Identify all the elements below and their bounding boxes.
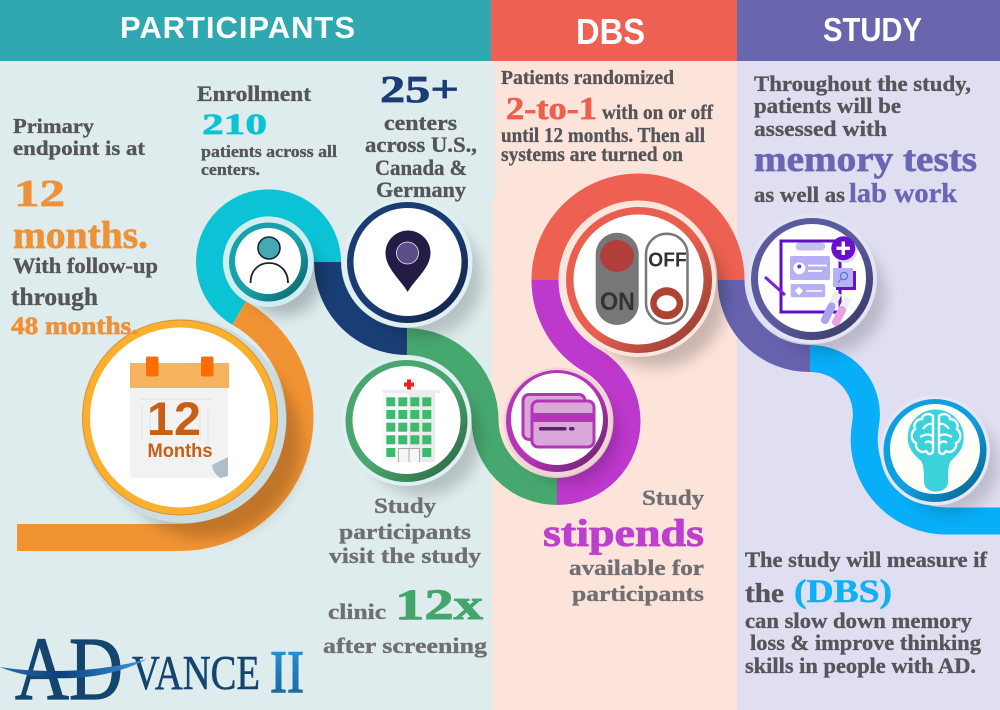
text: stipends: stipends <box>543 512 704 555</box>
text: clinic visits: after screening <box>323 633 487 658</box>
panel: DBS background <box>492 61 737 710</box>
text: randomization: with on or off <box>602 100 714 124</box>
text: clinic visits: participants <box>339 519 471 544</box>
text: stipends: available for <box>569 555 704 580</box>
text: stipends: participants <box>572 581 704 606</box>
text: enrollment: centers. <box>201 160 260 179</box>
text: primary endpoint: 12 <box>14 173 65 215</box>
text: memory tests: lab work <box>849 178 957 208</box>
text: memory tests: patients will be <box>754 93 901 118</box>
text: primary endpoint: 48 months. <box>11 313 138 340</box>
text: enrollment: Enrollment <box>197 81 312 106</box>
text: primary endpoint: through <box>11 284 98 311</box>
text: randomization: Patients randomized <box>501 67 674 89</box>
panel: participants background <box>0 0 495 710</box>
text: memory tests: Throughout the study, <box>754 71 971 96</box>
text: randomization <box>501 67 714 166</box>
text: randomization: until 12 months. Then all <box>501 123 705 147</box>
text: primary endpoint: With follow-up <box>13 253 158 278</box>
panel: study background <box>737 61 1000 710</box>
header: DBS: DBS <box>576 11 645 52</box>
icon: calendar 12 months badge: 12 <box>147 392 201 445</box>
icon: on off switch badge: OFF <box>648 250 687 272</box>
text: study measure: can slow down memory <box>745 608 972 633</box>
logo: ADvance II: VANCE <box>132 645 260 700</box>
text: study measure <box>745 547 988 678</box>
header: study <box>737 0 1000 61</box>
icon: credit cards badge <box>504 368 618 483</box>
header: participants: PARTICIPANTS <box>120 10 355 45</box>
text: primary endpoint: Primary <box>13 114 95 138</box>
text: primary endpoint: endpoint is at <box>13 136 145 160</box>
logo: ADvance II <box>0 620 304 710</box>
text: enrollment: patients across all <box>201 142 337 161</box>
text: enrollment <box>197 81 337 179</box>
text: memory tests <box>754 71 977 208</box>
text: memory tests: as well as <box>754 182 845 207</box>
text: stipends <box>543 485 704 606</box>
text: study measure: (DBS) <box>794 574 892 610</box>
text: study measure: skills in people with AD. <box>745 653 976 678</box>
text: 25+ centers <box>365 69 477 202</box>
text: enrollment: 210 <box>202 108 267 141</box>
text: clinic visits: 12x <box>395 582 484 629</box>
text: 25+ centers: across U.S., <box>365 132 477 157</box>
text: study measure: The study will measure if <box>745 547 988 572</box>
header: participants <box>0 0 491 61</box>
icon: location pin badge <box>342 198 482 337</box>
icon: calendar 12 months badge <box>82 319 301 538</box>
header: study: STUDY <box>823 11 922 48</box>
text: randomization: systems are turned on <box>501 142 683 166</box>
text: primary endpoint <box>11 114 158 340</box>
text: clinic visits <box>323 493 487 658</box>
text: 25+ centers: Canada & <box>375 155 467 180</box>
text: stipends: Study <box>642 485 704 510</box>
text: study measure: loss & improve thinking <box>750 630 981 655</box>
header: DBS <box>491 0 737 61</box>
text: 25+ centers: centers <box>384 110 457 135</box>
icon: on off switch badge <box>562 203 727 368</box>
icon: hospital badge <box>342 356 481 496</box>
text: memory tests: assessed with <box>754 116 887 141</box>
text: memory tests: memory tests <box>754 139 977 179</box>
text: clinic visits: Study <box>374 493 436 518</box>
text: randomization: 2-to-1 <box>506 90 597 126</box>
text: 25+ centers: Germany <box>376 177 466 202</box>
icon: brain light bulb badge <box>880 396 999 514</box>
text: clinic visits: visit the study <box>329 543 481 568</box>
icon: calendar 12 months badge: Months <box>148 441 212 462</box>
logo: ADvance II: II <box>270 639 304 705</box>
text: 25+ centers: 25+ <box>380 69 459 111</box>
icon: on off switch badge: ON <box>600 288 635 316</box>
icon: clipboard medical badge <box>747 214 886 354</box>
winding path ribbon <box>17 187 1000 538</box>
text: clinic visits: clinic <box>328 599 386 624</box>
text: primary endpoint: months. <box>13 214 148 257</box>
icon: person badge <box>224 217 322 316</box>
text: study measure: the <box>745 578 784 608</box>
